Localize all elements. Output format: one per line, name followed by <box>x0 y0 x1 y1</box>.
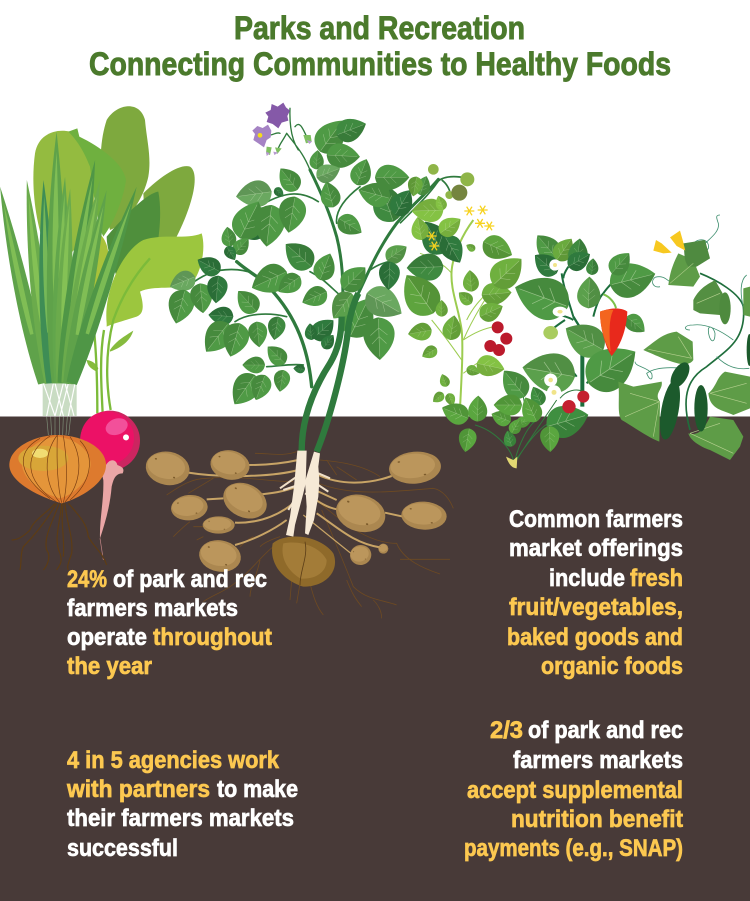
text block: year-round markets: the year <box>67 653 152 680</box>
soil ground <box>0 416 750 901</box>
onion bulb <box>9 435 107 570</box>
text block: common offerings: baked goods and <box>507 624 683 651</box>
potato leaves <box>164 112 433 412</box>
text block: partners: with partners <box>66 776 210 803</box>
onion green blades <box>0 132 144 386</box>
title <box>89 10 671 82</box>
text block: nutrition benefit payments: of park and rec <box>528 717 683 744</box>
stolons <box>188 460 403 554</box>
title: Parks and Recreation <box>234 10 525 46</box>
plant: potato tubers and roots <box>143 447 453 618</box>
radish <box>80 411 140 560</box>
text block: partners: 4 in 5 agencies work <box>67 747 280 774</box>
text block: nutrition benefit payments: farmers markets <box>513 747 683 774</box>
text block: nutrition benefit payments: nutrition benefit <box>511 806 683 833</box>
main seed potato <box>272 537 335 587</box>
white root core <box>280 451 330 537</box>
pepper plant <box>508 228 659 407</box>
pepper fruit <box>600 294 627 356</box>
text block: nutrition benefit payments: accept supplemental <box>467 777 683 804</box>
tomato fruits <box>428 164 512 356</box>
text block: nutrition benefit payments: 2/3 <box>490 717 523 744</box>
text block: partners: their farmers markets <box>67 805 294 832</box>
text block: partners <box>66 747 298 862</box>
potato flowers <box>252 103 312 156</box>
text block: common offerings: fruit/vegetables, <box>509 594 683 621</box>
plant: spinach and radish <box>0 106 203 570</box>
plant: tomato <box>393 164 750 468</box>
plant: potato foliage <box>164 103 438 452</box>
fine roots <box>167 452 453 618</box>
text block: year-round markets: throughout <box>153 624 272 651</box>
text block: year-round markets <box>67 566 272 680</box>
text block: common offerings: market offerings <box>509 535 683 562</box>
cucumber plant <box>618 215 750 460</box>
potato stems lower <box>302 293 358 452</box>
text block: partners: successful <box>67 835 178 862</box>
tomato stems <box>400 177 500 408</box>
text block: common offerings <box>507 506 683 680</box>
spinach leaves <box>33 106 203 413</box>
text block: year-round markets: operate <box>67 624 147 651</box>
text block: year-round markets: farmers markets <box>67 595 238 622</box>
text block: year-round markets: of park and rec <box>113 566 267 593</box>
tomato leaves <box>393 175 531 408</box>
tomato flowers <box>427 206 494 250</box>
tubers <box>143 447 447 575</box>
text block: nutrition benefit payments: payments (e.g., SNAP) <box>464 835 683 862</box>
text block: common offerings: include <box>549 565 625 592</box>
text block: common offerings: Common farmers <box>509 506 683 533</box>
text block: nutrition benefit payments <box>464 717 683 862</box>
text block: common offerings: organic foods <box>541 653 683 680</box>
text block: year-round markets: 24% <box>67 566 107 593</box>
potato stems <box>192 108 438 387</box>
strawberry plant <box>438 363 593 468</box>
text block: partners: to make <box>217 776 298 803</box>
title: Connecting Communities to Healthy Foods <box>89 46 671 82</box>
onion mesh stalk <box>43 383 77 435</box>
text block: common offerings: fresh <box>630 565 683 592</box>
